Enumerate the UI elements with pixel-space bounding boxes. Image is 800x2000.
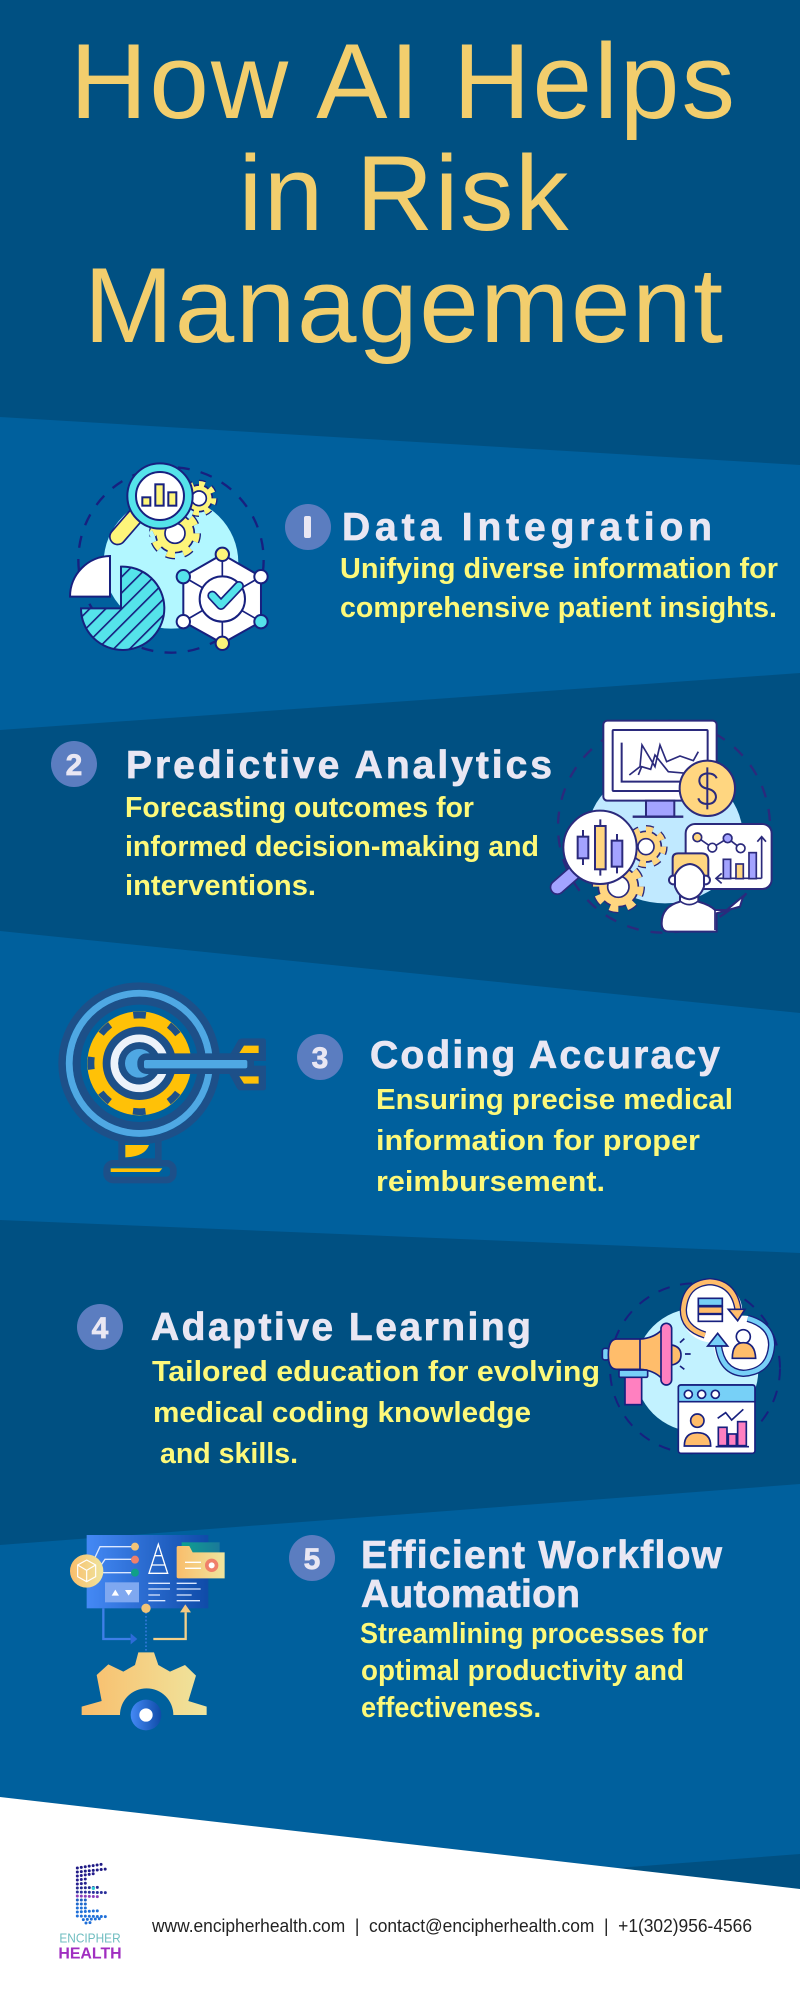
number badge 3 — [297, 1034, 343, 1080]
heading: efficient workflow automation — [361, 1534, 723, 1616]
heading: data integration: Data Integration — [342, 506, 712, 549]
description: data integration — [340, 553, 778, 624]
panel: adaptive learning — [77, 1281, 780, 1470]
number badge 5 — [289, 1535, 335, 1581]
heading: efficient workflow automation: Efficient Workflow — [361, 1534, 723, 1577]
logo: encipher health — [58, 1864, 122, 1962]
description: workflow automation: optimal productivity and — [361, 1655, 684, 1687]
title — [70, 21, 735, 365]
heading: predictive analytics: Predictive Analytics — [126, 744, 552, 787]
description: adaptive learning — [152, 1356, 600, 1470]
title: in Risk — [238, 133, 569, 253]
number badge 2 — [51, 741, 97, 787]
heading: adaptive learning: Adaptive Learning — [151, 1306, 531, 1349]
number badge 5: 5 — [304, 1543, 320, 1576]
icon: target with arrow — [62, 986, 266, 1180]
description: data integration: comprehensive patient insights. — [340, 592, 777, 624]
icon: megaphone and data cycle — [602, 1281, 780, 1453]
title: How AI Helps — [70, 21, 735, 141]
number badge 3: 3 — [312, 1042, 328, 1075]
panel: data integration — [70, 463, 778, 653]
number badge 1 — [285, 504, 331, 550]
description: coding accuracy: Ensuring precise medical — [376, 1084, 733, 1116]
description: workflow automation: effectiveness. — [361, 1692, 541, 1724]
footer contact line: www.encipherhealth.com | contact@encipherhealth.com | +1(302)956-4566 — [151, 1916, 752, 1936]
description: adaptive learning: Tailored education for evolving — [152, 1356, 600, 1388]
heading: coding accuracy: Coding Accuracy — [370, 1034, 720, 1077]
icon: predictive analytics — [557, 721, 772, 933]
description: predictive analytics: informed decision-making and — [125, 831, 539, 863]
description: adaptive learning: medical coding knowledge — [153, 1397, 531, 1429]
description: coding accuracy: reimbursement. — [376, 1166, 605, 1198]
description: coding accuracy — [376, 1084, 733, 1198]
logo: encipher health: ENCIPHER — [59, 1931, 121, 1946]
icon: workflow gear and dashboard — [70, 1535, 225, 1730]
description: predictive analytics: Forecasting outcomes for — [125, 792, 474, 824]
icon: data integration — [70, 463, 268, 653]
description: predictive analytics: interventions. — [125, 870, 316, 902]
description: workflow automation: Streamlining processes for — [360, 1618, 708, 1650]
panel: coding accuracy — [62, 986, 733, 1198]
number badge 2: 2 — [66, 749, 82, 782]
number badge 4: 4 — [92, 1312, 109, 1345]
number badge 4 — [77, 1304, 123, 1350]
logo: encipher health: HEALTH — [58, 1945, 122, 1962]
description: workflow automation — [360, 1618, 708, 1724]
description: coding accuracy: information for proper — [376, 1125, 700, 1157]
heading: efficient workflow automation: Automation — [361, 1573, 580, 1616]
description: data integration: Unifying diverse information for — [340, 553, 778, 585]
description: predictive analytics — [125, 792, 539, 902]
title: Management — [84, 245, 723, 365]
description: adaptive learning: and skills. — [160, 1438, 298, 1470]
panel: predictive analytics — [51, 721, 772, 933]
panel: workflow automation — [70, 1534, 723, 1730]
